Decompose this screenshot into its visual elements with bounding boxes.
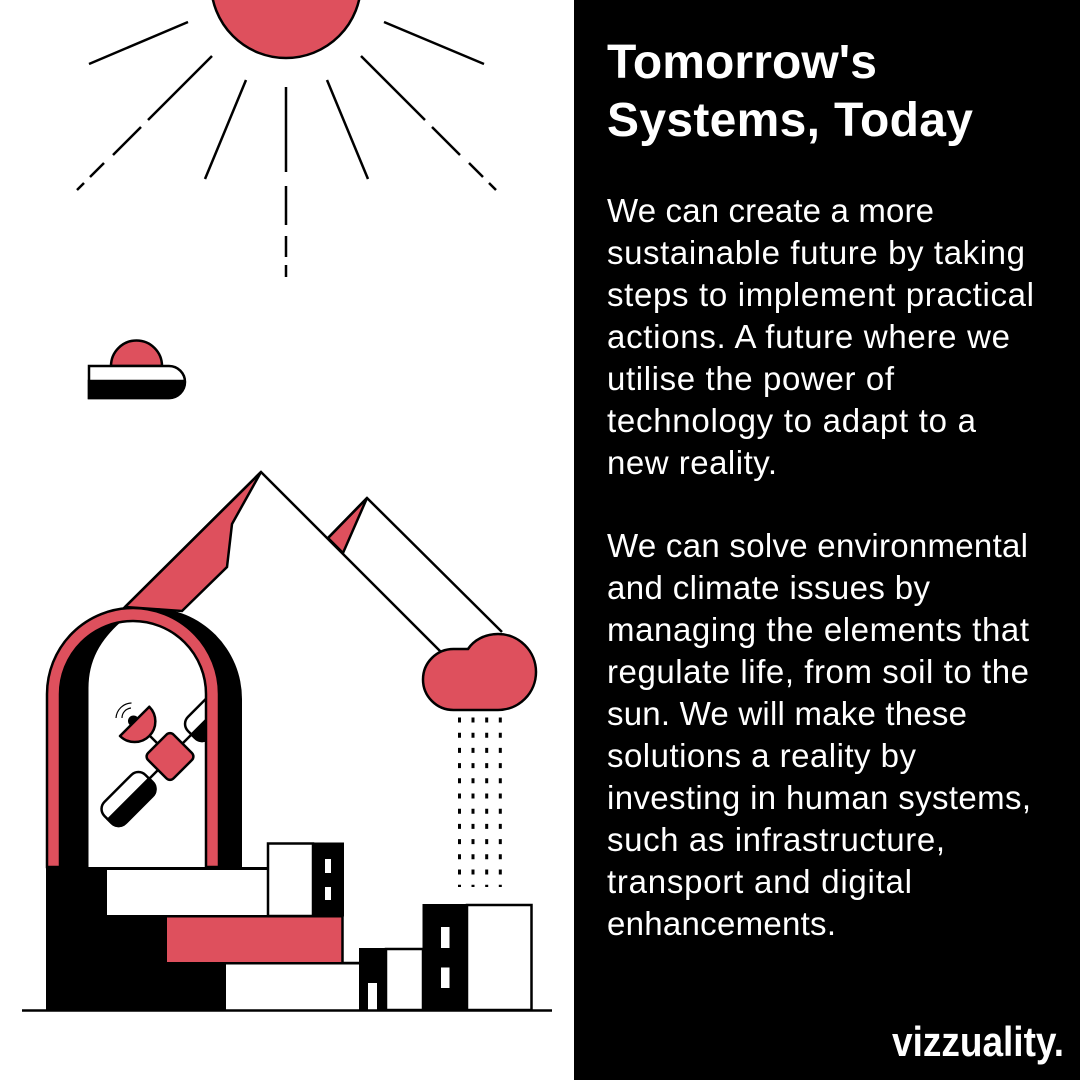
paragraph 2 bbox=[607, 527, 1031, 942]
paragraph 1 bbox=[607, 192, 1034, 481]
building: upper bbox=[268, 842, 344, 916]
icon: sun bbox=[77, 0, 496, 277]
paragraph 2: solutions a reality by bbox=[607, 737, 916, 774]
building: small bbox=[359, 948, 423, 1010]
paragraph 1: steps to implement practical bbox=[607, 276, 1034, 313]
sun rays bbox=[77, 22, 496, 277]
paragraph 1: actions. A future where we bbox=[607, 318, 1010, 355]
paragraph 2: managing the elements that bbox=[607, 611, 1029, 648]
paragraph 2: sun. We will make these bbox=[607, 695, 967, 732]
illustration bbox=[22, 0, 552, 1010]
paragraph 2: transport and digital bbox=[607, 863, 912, 900]
panel: text bbox=[574, 0, 1080, 1080]
icon: satellite bbox=[100, 698, 205, 828]
building: large bbox=[422, 904, 532, 1010]
paragraph 2: investing in human systems, bbox=[607, 779, 1031, 816]
rain cloud bbox=[423, 634, 536, 710]
title bbox=[607, 36, 973, 147]
paragraph 2: We can solve environmental bbox=[607, 527, 1028, 564]
paragraph 2: enhancements. bbox=[607, 905, 836, 942]
paragraph 1: technology to adapt to a bbox=[607, 402, 977, 439]
ground line bbox=[22, 1009, 552, 1012]
paragraph 2: regulate life, from soil to the bbox=[607, 653, 1029, 690]
paragraph 2: such as infrastructure, bbox=[607, 821, 945, 858]
paragraph 1: We can create a more bbox=[607, 192, 934, 229]
icon: small cloud bbox=[89, 340, 185, 398]
paragraph 1: utilise the power of bbox=[607, 360, 895, 397]
paragraph 2: and climate issues by bbox=[607, 569, 930, 606]
title: Tomorrow's bbox=[607, 36, 877, 89]
title: Systems, Today bbox=[607, 94, 973, 147]
left stacked blocks bbox=[46, 867, 360, 1010]
paragraph 1: new reality. bbox=[607, 444, 777, 481]
rain dots bbox=[460, 718, 500, 887]
mountains bbox=[125, 472, 502, 720]
paragraph 1: sustainable future by taking bbox=[607, 234, 1025, 271]
arch bbox=[47, 608, 243, 867]
